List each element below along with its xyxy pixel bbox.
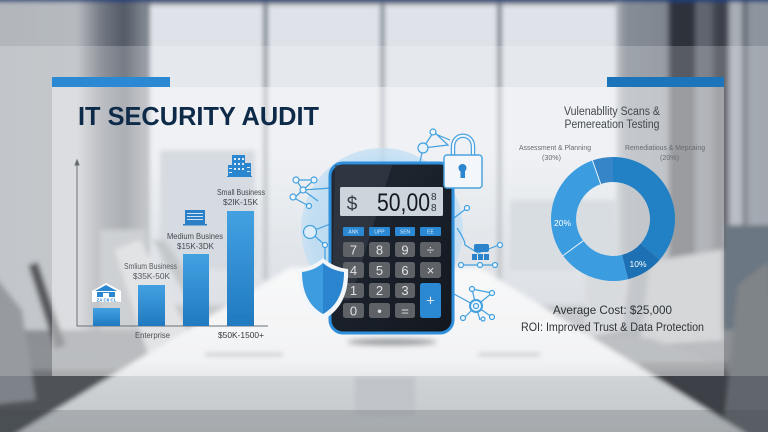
average cost: Average Cost: $25,000 <box>553 303 672 317</box>
icon: database <box>472 244 489 260</box>
value: 10%: 10% <box>629 259 647 269</box>
number keys: • <box>377 304 382 318</box>
icon: small house <box>92 283 121 302</box>
calculator body <box>330 163 453 333</box>
label: small business: $2lK-15K <box>223 198 259 207</box>
number keys: 9 <box>401 242 409 258</box>
calculator display <box>340 187 443 217</box>
calculator display: 8 <box>431 203 437 214</box>
label: assessment: (30%) <box>542 153 561 162</box>
label: medium business: $15K-3DK <box>177 242 215 251</box>
ROI line: ROI: Improved Trust & Data Protection <box>521 322 704 334</box>
label: smlium business: Smlium Business <box>124 262 177 271</box>
number keys <box>343 242 441 318</box>
number keys: 0 <box>350 304 357 318</box>
screen glare <box>332 165 392 300</box>
bar 3 <box>183 254 209 326</box>
icon: padlock <box>444 136 482 188</box>
chairs left <box>0 270 36 405</box>
function keys <box>343 227 441 236</box>
number keys: 6 <box>401 263 409 278</box>
main glass panel <box>52 87 724 376</box>
chart axes <box>75 160 268 326</box>
upper translucent band <box>0 46 768 376</box>
table <box>12 268 750 432</box>
icon: small house: ZA CII CL <box>96 298 117 302</box>
network right lower <box>454 286 494 321</box>
function keys: EE <box>427 230 434 236</box>
bar 2 <box>138 285 165 326</box>
number keys: 8 <box>376 242 383 258</box>
central calculator illustration <box>290 129 502 345</box>
function keys: ANK <box>348 230 359 236</box>
accent bar: left <box>52 77 170 87</box>
network right middle <box>454 206 502 268</box>
segment: lower light <box>563 241 628 281</box>
number keys: 7 <box>350 242 357 258</box>
axis label: price: $50K-1500+ <box>218 331 264 340</box>
label: small business: Small Business <box>217 188 265 197</box>
function keys: SEN <box>400 230 411 236</box>
chairs right <box>640 250 722 345</box>
number keys: 1 <box>350 283 357 298</box>
label: medium business: Medium Busines <box>167 232 223 241</box>
calculator display: 8 <box>431 192 437 203</box>
label: smlium business: $35K-50K <box>133 272 171 281</box>
segment separators <box>563 160 601 256</box>
number keys: 2 <box>376 283 383 298</box>
number keys: 3 <box>401 283 409 298</box>
icon: tall office building <box>227 155 252 177</box>
right column: donut section <box>519 106 705 334</box>
number keys: + <box>426 292 435 310</box>
bar chart: cost by business size <box>75 155 268 340</box>
calculator display: $ <box>347 194 358 215</box>
number keys: × <box>427 263 434 278</box>
bar 4 <box>227 211 254 326</box>
network left lower <box>304 224 330 260</box>
lower dark band <box>0 410 768 432</box>
number keys: ÷ <box>427 242 434 258</box>
number keys: 5 <box>376 263 383 278</box>
segment: small mid <box>592 157 613 184</box>
calculator display: 50,00 <box>377 189 430 217</box>
segment: 10% <box>622 244 660 279</box>
number keys: 4 <box>350 263 357 278</box>
donut heading: Vulenabllity Scans & <box>564 106 660 118</box>
bar 1 <box>93 308 120 326</box>
icon: mid-size office <box>183 210 207 226</box>
number keys: = <box>401 304 409 318</box>
calculator shadow <box>347 339 437 345</box>
network left upper <box>290 177 331 208</box>
label: assessment: Assessment & Planning <box>519 143 591 152</box>
segment: 20% <box>551 160 601 256</box>
function keys: UPP <box>374 230 385 236</box>
accent bar: right <box>607 77 724 87</box>
label: remediation: Remediatious & Mepcaing <box>625 143 705 152</box>
icon: shield <box>298 258 348 320</box>
halo circle <box>301 148 463 310</box>
donut heading: Pemereation Testing <box>564 119 660 131</box>
donut chart <box>551 157 675 281</box>
segment: main dark <box>613 157 675 260</box>
network top <box>418 129 450 162</box>
title: IT SECURITY AUDIT <box>78 101 319 131</box>
axis label: enterprise: Enterprise <box>135 331 171 340</box>
value: 20%: 20% <box>554 218 571 228</box>
label: remediation: (20%) <box>660 153 679 162</box>
